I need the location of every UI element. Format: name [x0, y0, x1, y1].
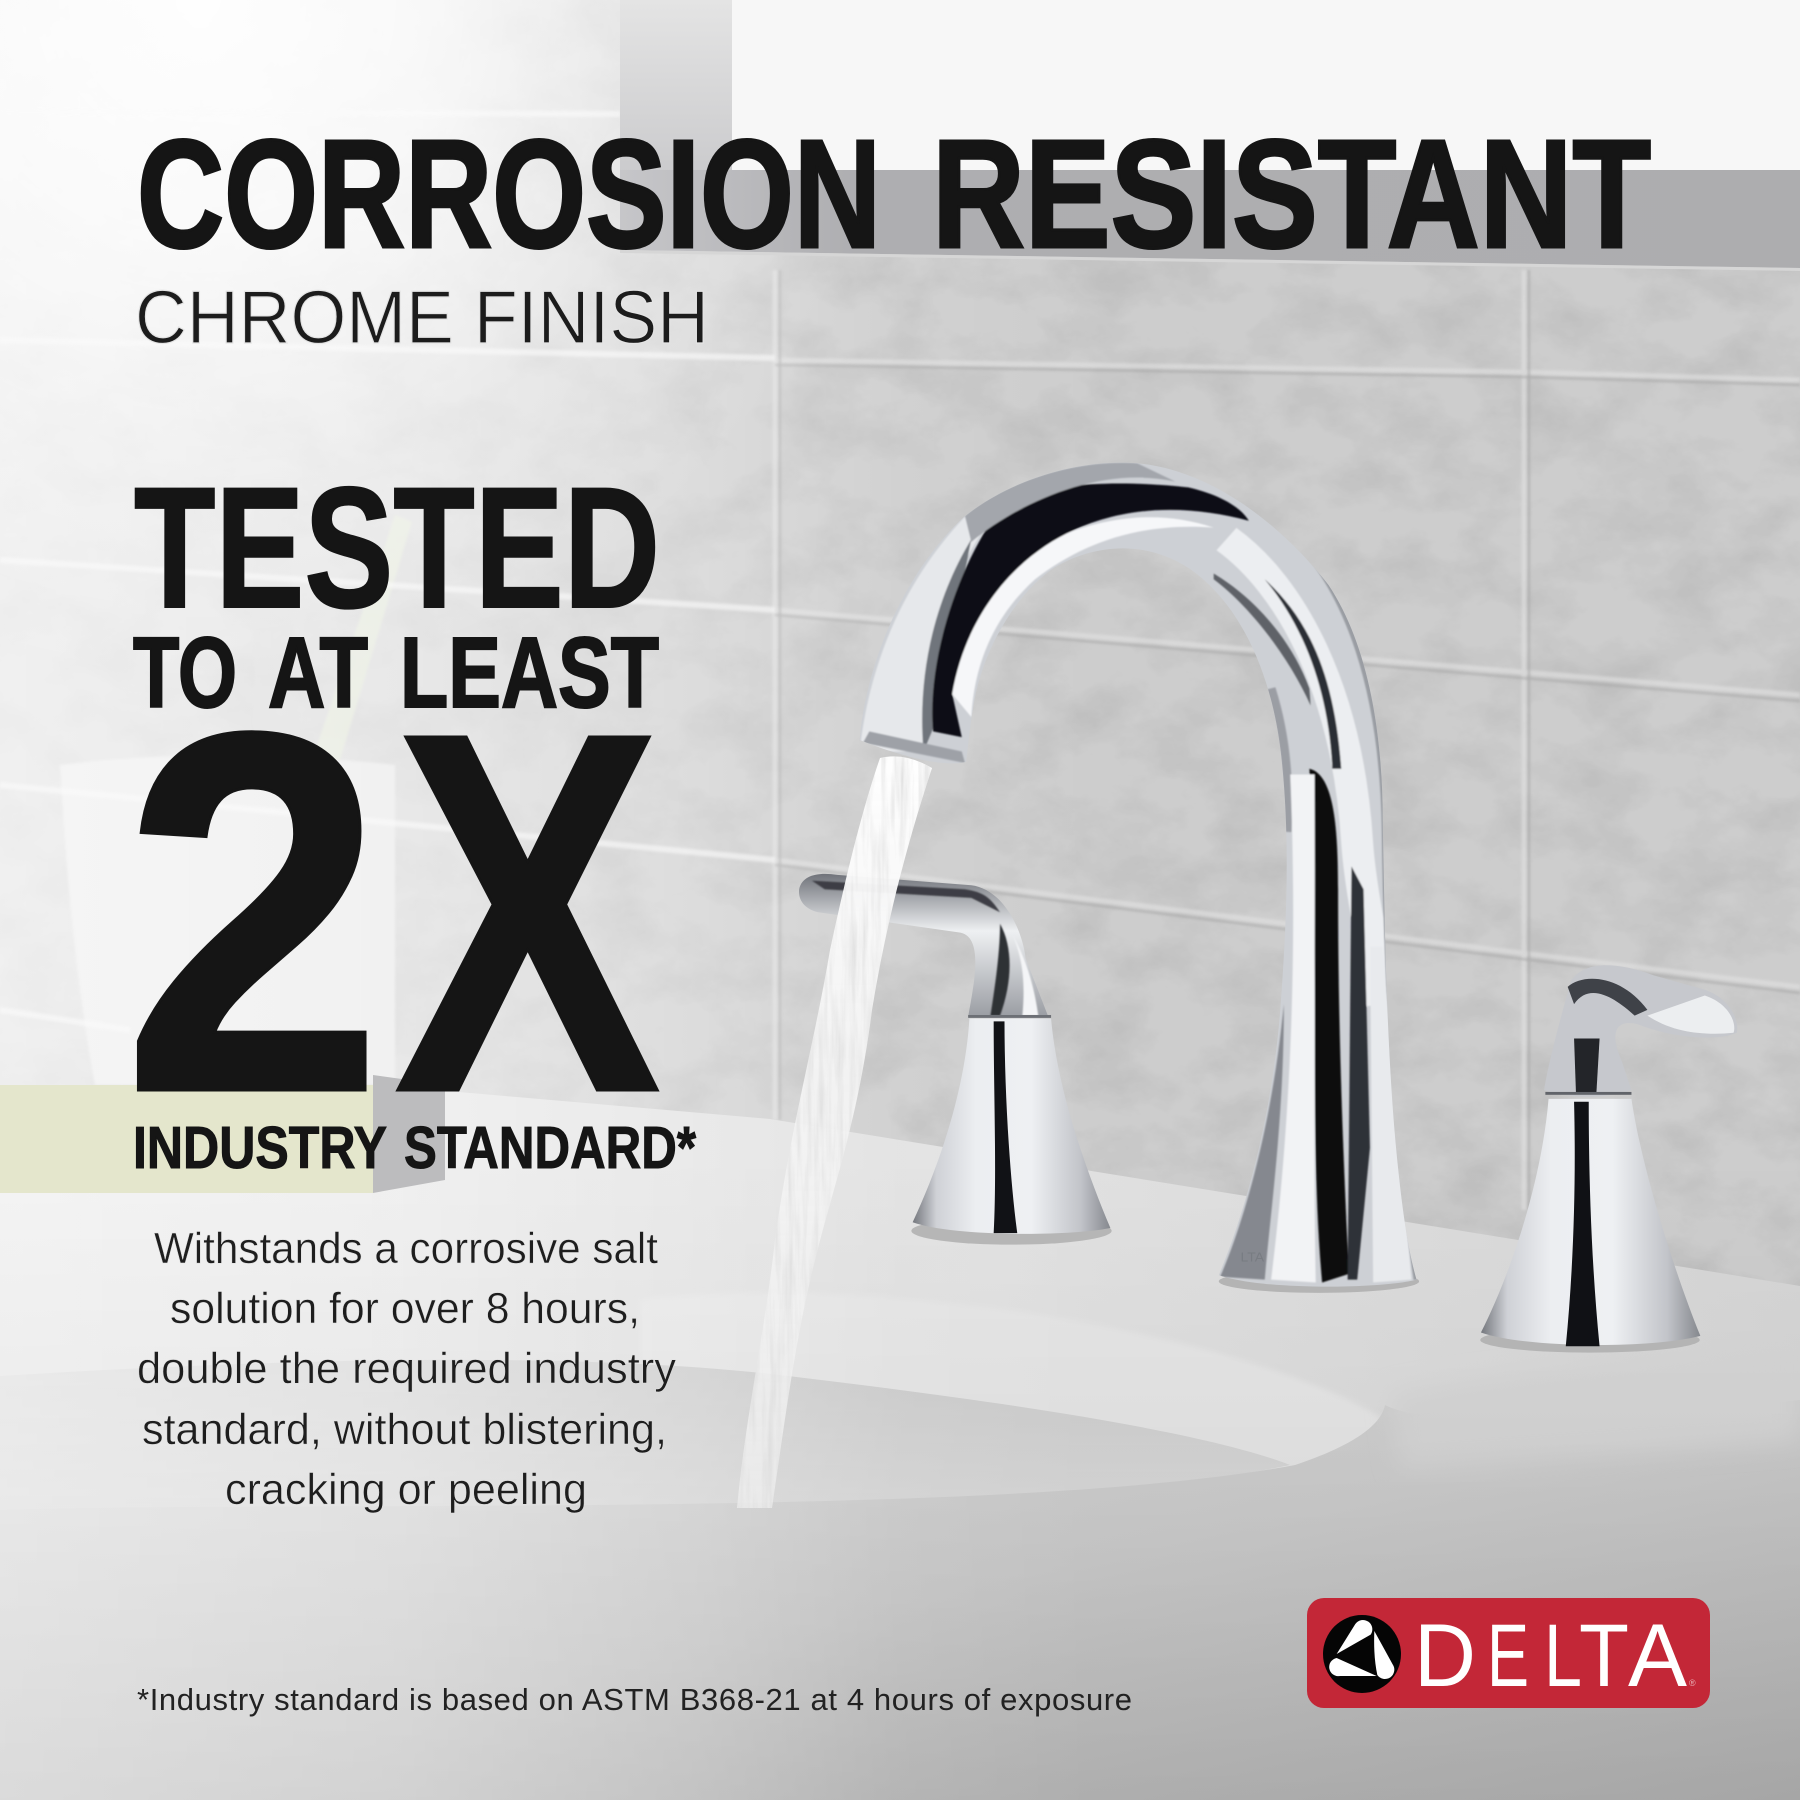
headline: tested to at least: TO	[133, 617, 237, 729]
toothpaste tube	[0, 1075, 445, 1193]
description text: double the required industry	[137, 1344, 676, 1393]
headline: tested to at least	[133, 452, 660, 729]
big number 2X: X	[394, 626, 663, 1199]
title: CORROSION	[137, 108, 881, 280]
Delta logo: A	[1628, 1605, 1688, 1705]
spout	[860, 463, 1419, 1293]
Delta logo: E	[1487, 1605, 1529, 1705]
faucet	[799, 463, 1737, 1353]
headline: tested to at least: LEAST	[400, 617, 659, 729]
running water stream	[737, 756, 932, 1508]
title	[137, 108, 1651, 280]
headline: tested to at least: AT	[268, 617, 368, 729]
footnote: *Industry standard is based on ASTM B368-21 at 4 hours of exposure	[137, 1682, 1132, 1717]
maker mark: LTA	[1240, 1250, 1264, 1264]
basin	[0, 1350, 1800, 1800]
tile joints faded on the left	[0, 112, 775, 1030]
description text: standard, without blistering,	[142, 1405, 667, 1454]
Delta logo: L	[1544, 1605, 1582, 1705]
headline: tested to at least: TESTED	[134, 452, 660, 644]
big number 2X: 2	[122, 626, 384, 1199]
Delta logo: D	[1414, 1605, 1476, 1705]
description text: solution for over 8 hours,	[170, 1284, 640, 1333]
cup and toothbrush	[60, 480, 412, 1085]
title: RESISTANT	[932, 108, 1651, 280]
description text	[137, 1224, 676, 1514]
icon: delta triangle mark	[1323, 1615, 1401, 1693]
window and ledge	[620, 0, 1800, 271]
headline: industry standard	[133, 1115, 696, 1181]
description text: Withstands a corrosive salt	[154, 1224, 658, 1273]
Delta logo: ®	[1689, 1678, 1696, 1688]
right handle	[1480, 965, 1737, 1353]
countertop	[0, 1090, 1800, 1800]
big number 2X	[122, 626, 663, 1199]
subtitle: CHROME FINISH	[135, 275, 709, 359]
tiled wall	[0, 0, 1800, 1400]
headline: industry standard: INDUSTRY	[133, 1115, 387, 1181]
description text: cracking or peeling	[225, 1465, 587, 1514]
left handle	[799, 874, 1112, 1245]
Delta logo	[1307, 1598, 1710, 1708]
headline: industry standard: STANDARD*	[404, 1115, 696, 1181]
Delta logo: T	[1579, 1605, 1629, 1705]
